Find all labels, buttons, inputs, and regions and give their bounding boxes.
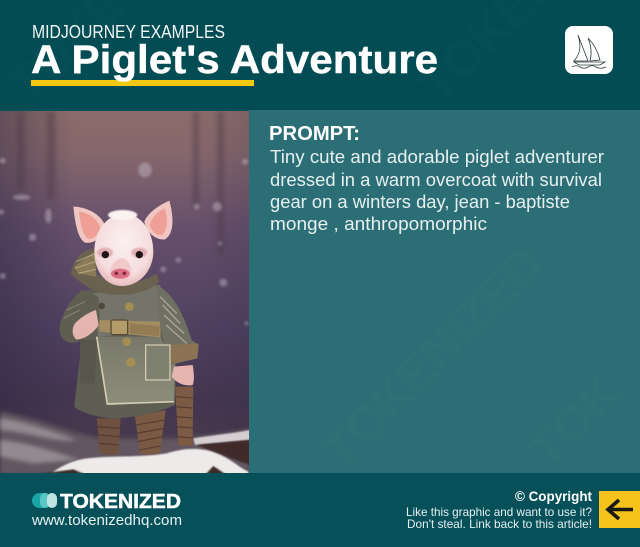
copyright notice [406, 489, 592, 531]
snout [110, 258, 131, 283]
skirt shadow [80, 340, 97, 383]
right sleeve [157, 285, 199, 365]
eye shadows [97, 248, 147, 258]
copyright notice: Like this graphic and want to use it? [406, 505, 592, 519]
copyright notice: © Copyright [515, 489, 592, 504]
eyes [102, 251, 143, 258]
coat [59, 248, 199, 418]
logo mark [32, 493, 57, 508]
footer band [0, 473, 640, 547]
hands [73, 310, 194, 385]
legs [97, 387, 193, 455]
collar / hood [71, 248, 159, 295]
right cuff [168, 343, 199, 364]
prompt body text [270, 146, 604, 234]
prompt body text: Tiny cute and adorable piglet adventurer [270, 146, 604, 167]
title: A Piglet's Adventure [31, 38, 438, 82]
header band [0, 0, 640, 110]
prompt body text: monge , anthropomorphic [270, 213, 487, 234]
coat pocket [146, 345, 170, 380]
prompt heading: PROMPT: [269, 123, 360, 145]
head shape [94, 214, 153, 286]
footer logo [32, 491, 181, 513]
copyright notice: Don't steal. Link back to this article! [407, 517, 592, 531]
title underline [31, 80, 254, 86]
panel: prompt [269, 123, 604, 234]
prompt body text: dressed in a warm overcoat with survival [270, 169, 602, 190]
prompt body text: gear on a winters day, jean - baptiste [270, 191, 570, 212]
coat front panel [97, 337, 175, 405]
icon: Midjourney sailboat [565, 26, 613, 74]
forest tree trunks [17, 112, 224, 255]
chest [94, 285, 161, 336]
ear right [144, 201, 172, 239]
prompt panel background [249, 110, 640, 473]
icon: yellow arrow box [599, 491, 640, 528]
website url: www.tokenizedhq.com [31, 513, 182, 529]
buttons [98, 302, 135, 367]
falling snow [0, 158, 249, 325]
coat body [74, 285, 177, 418]
left sleeve [59, 290, 100, 343]
snowy ground [0, 412, 250, 475]
piglet head [73, 201, 172, 286]
tuft [108, 210, 137, 220]
logo wordmark: TOKENIZED [60, 491, 181, 513]
ear left [73, 207, 105, 243]
belt [99, 320, 161, 337]
picture: piglet adventurer in snowy forest [0, 111, 250, 475]
subtitle: MIDJOURNEY EXAMPLES [32, 22, 225, 42]
